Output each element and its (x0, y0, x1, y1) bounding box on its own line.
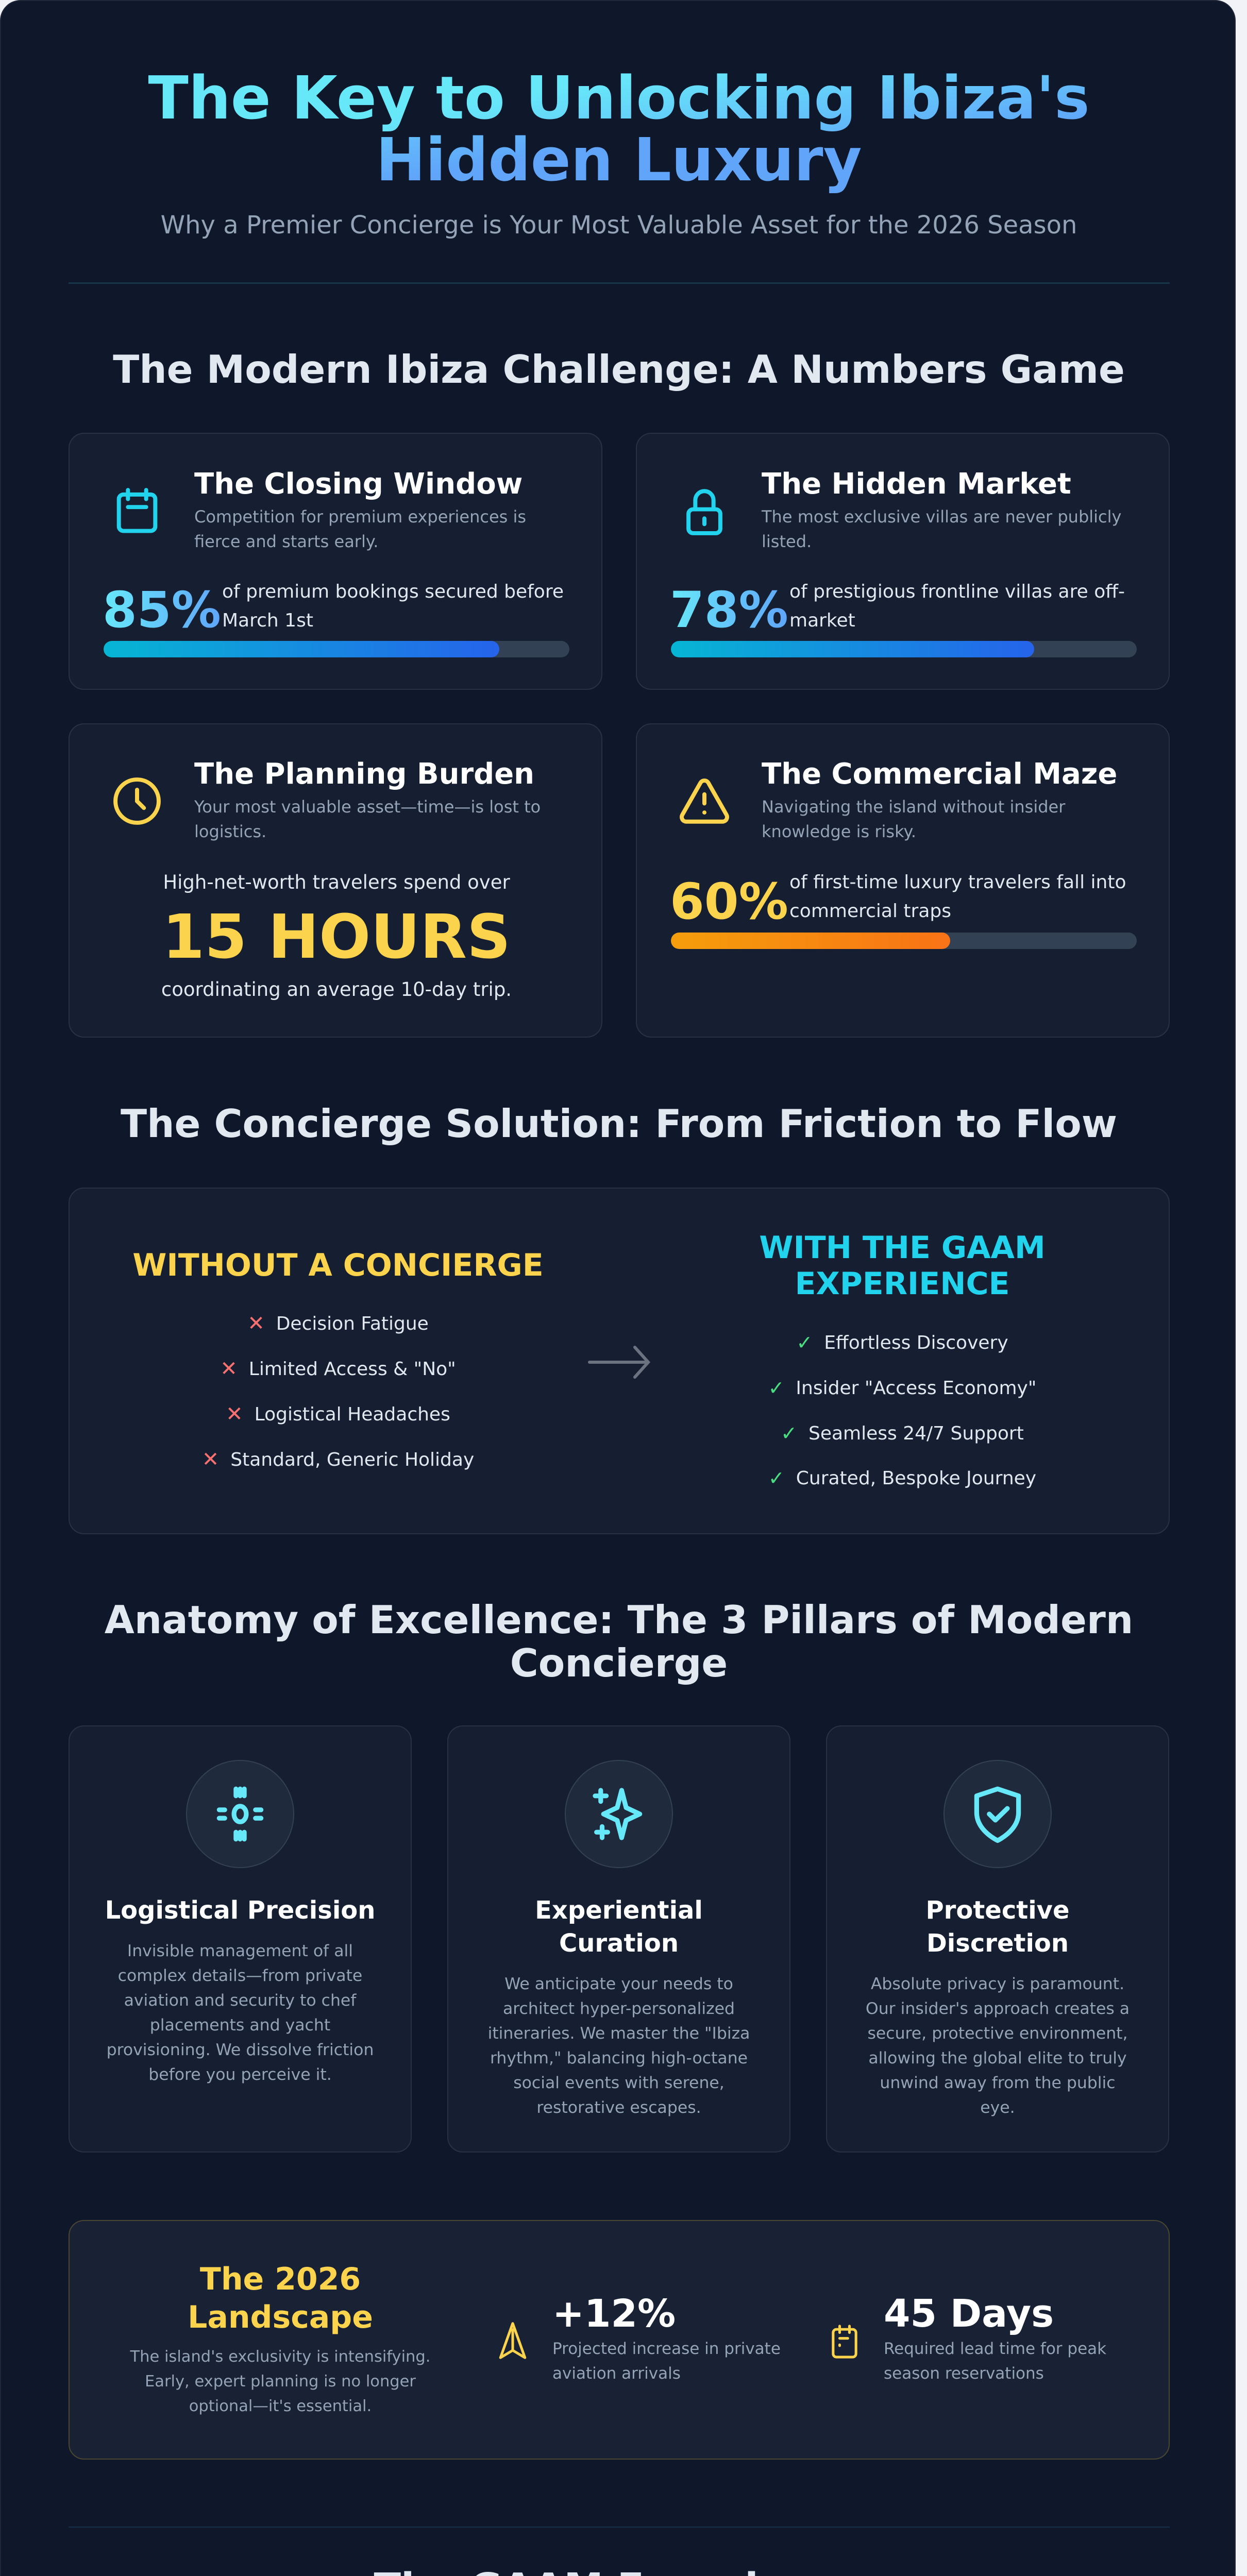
description: placements and yacht (150, 2016, 330, 2035)
title: Protective (925, 1896, 1070, 1925)
card: commercial maze: commercial traps (789, 901, 951, 922)
description: The most exclusive villas are never publicly (762, 507, 1121, 527)
title (925, 1896, 1070, 1958)
list item: Decision Fatigue (276, 1313, 429, 1334)
stat: 15 hours: High-net-worth travelers spend over (163, 871, 510, 893)
description: listed. (762, 532, 812, 551)
description: Absolute privacy is paramount. (871, 1975, 1124, 1993)
list item: Logistical Headaches (255, 1403, 450, 1425)
list item: ✓ (768, 1377, 784, 1399)
stat 85%: 85% (103, 581, 221, 639)
stat: 45 days (827, 2288, 1147, 2391)
pillar: protective discretion (826, 1725, 1169, 2153)
description: provisioning. We dissolve friction (107, 2041, 374, 2059)
list item: ✕ (202, 1448, 219, 1471)
description: The island's exclusivity is intensifying. (130, 2348, 430, 2366)
card: hidden market: market (789, 610, 855, 631)
title: Curation (559, 1929, 679, 1958)
heading: pillars (105, 1597, 1133, 1686)
description: knowledge is risky. (762, 822, 916, 841)
list item: ✓ (768, 1467, 785, 1489)
description: rhythm," balancing high-octane (490, 2049, 748, 2067)
list item: ✓ (781, 1422, 797, 1445)
list item: Limited Access & "No" (249, 1358, 456, 1380)
card: closing window: March 1st (222, 610, 313, 631)
pillar: experiential curation (447, 1725, 790, 2153)
heading with: EXPERIENCE (795, 1266, 1009, 1302)
panel: comparison (69, 1188, 1170, 1534)
description (552, 2336, 781, 2386)
description: complex details—from private (118, 1967, 362, 1985)
list item: ✓ (796, 1331, 813, 1354)
heading (121, 2260, 440, 2336)
card: hidden market (636, 433, 1170, 690)
list item: Curated, Bespoke Journey (796, 1467, 1036, 1489)
description: allowing the global elite to truly (868, 2049, 1127, 2067)
description (194, 507, 526, 551)
description: fierce and starts early. (194, 532, 378, 551)
icon: sparkle (565, 1760, 673, 1868)
description (884, 2336, 1106, 2386)
heading: concierge solution: The Concierge Solution: From Friction to Flow (121, 1101, 1117, 1146)
title (148, 64, 1090, 195)
bar (671, 641, 1137, 657)
description: Competition for premium experiences is (194, 507, 526, 527)
heading with (759, 1230, 1046, 1302)
heading without: WITHOUT A CONCIERGE (132, 1247, 544, 1283)
card: hidden market: of prestigious frontline villas are off- (789, 581, 1125, 602)
value: 45 Days (884, 2292, 1054, 2336)
heading: The 2026 (200, 2261, 361, 2297)
description: itineraries. We master the "Ibiza (488, 2024, 750, 2043)
description (762, 507, 1121, 551)
heading with: WITH THE GAAM (759, 1230, 1046, 1266)
description: social events with serene, (513, 2074, 724, 2092)
column: without (132, 1247, 544, 1471)
title: Experiential (535, 1896, 703, 1925)
heading: pillars: Anatomy of Excellence: The 3 Pillars of Modern (105, 1597, 1133, 1642)
bar (671, 933, 1137, 949)
subtitle: Why a Premier Concierge is Your Most Valuable Asset for the 2026 Season (161, 211, 1077, 240)
icon: plane (493, 2321, 532, 2360)
icon: warning (680, 778, 729, 824)
description: Navigating the island without insider (762, 797, 1065, 817)
list item: ✕ (226, 1402, 243, 1426)
title: Hidden Luxury (376, 126, 862, 195)
title: Discretion (926, 1929, 1069, 1958)
stat 78%: 78% (670, 581, 788, 639)
description: unwind away from the public (880, 2074, 1116, 2092)
icon: calendar (825, 2322, 864, 2361)
description: Early, expert planning is no longer (145, 2372, 416, 2391)
description: optional—it's essential. (189, 2397, 372, 2415)
heading: Landscape (188, 2299, 373, 2335)
list item: Seamless 24/7 Support (808, 1423, 1024, 1444)
card: planning burden: coordinating an average 10-day trip. (161, 978, 512, 1001)
description: secure, protective environment, (867, 2024, 1128, 2043)
icon: precision (186, 1760, 294, 1868)
list item: ✕ (220, 1357, 238, 1381)
description (194, 797, 541, 841)
description: restorative escapes. (536, 2098, 701, 2117)
description (107, 1942, 374, 2084)
description (121, 2345, 440, 2419)
description: before you perceive it. (148, 2065, 332, 2084)
description: aviation and security to chef (124, 1991, 356, 2010)
card: closing window (69, 433, 602, 690)
description: season reservations (884, 2364, 1044, 2383)
description: Required lead time for peak (884, 2340, 1106, 2358)
description (762, 797, 1066, 841)
title: The Commercial Maze (762, 757, 1117, 791)
column: with (759, 1230, 1046, 1489)
icon: clock (113, 777, 161, 825)
icon: lock (686, 489, 722, 535)
list item: Effortless Discovery (824, 1332, 1008, 1353)
panel: 2026 landscape (69, 2220, 1170, 2460)
title: The Closing Window (194, 467, 523, 501)
description: architect hyper-personalized (503, 1999, 735, 2018)
title: Logistical Precision (105, 1896, 375, 1925)
description: eye. (980, 2098, 1015, 2117)
title (535, 1896, 703, 1958)
description: aviation arrivals (552, 2364, 681, 2383)
card: commercial maze: of first-time luxury travelers fall into (789, 872, 1126, 893)
bar (104, 641, 569, 657)
arrow (588, 1346, 650, 1379)
description: logistics. (194, 822, 266, 841)
title: The Hidden Market (762, 467, 1071, 501)
heading: numbers game: The Modern Ibiza Challenge: A Numbers Game (113, 347, 1125, 392)
description: Your most valuable asset—time—is lost to (194, 797, 541, 817)
stat 60%: 60% (670, 873, 788, 930)
stat: +12% (493, 2288, 802, 2391)
title: The Key to Unlocking Ibiza's (148, 64, 1090, 133)
pillar: logistical precision (69, 1725, 412, 2153)
landscape intro (130, 2261, 430, 2415)
list item: Insider "Access Economy" (796, 1378, 1036, 1398)
value: +12% (552, 2292, 676, 2336)
icon: calendar (116, 488, 158, 533)
card: closing window: of premium bookings secured before (222, 581, 564, 602)
card: planning burden (69, 723, 602, 1038)
list item: Standard, Generic Holiday (230, 1449, 474, 1470)
description: Our insider's approach creates a (866, 1999, 1130, 2018)
description: Invisible management of all (127, 1942, 353, 1960)
card: planning burden: 15 HOURS (162, 901, 511, 972)
description: Projected increase in private (552, 2340, 781, 2358)
description: We anticipate your needs to (504, 1975, 733, 1993)
card: commercial maze (636, 723, 1170, 1038)
heading: pillars: Concierge (510, 1640, 728, 1686)
title: The Planning Burden (194, 757, 534, 791)
description (488, 1975, 750, 2117)
list item: ✕ (247, 1312, 265, 1335)
icon: shield (943, 1760, 1052, 1868)
description (866, 1975, 1130, 2117)
